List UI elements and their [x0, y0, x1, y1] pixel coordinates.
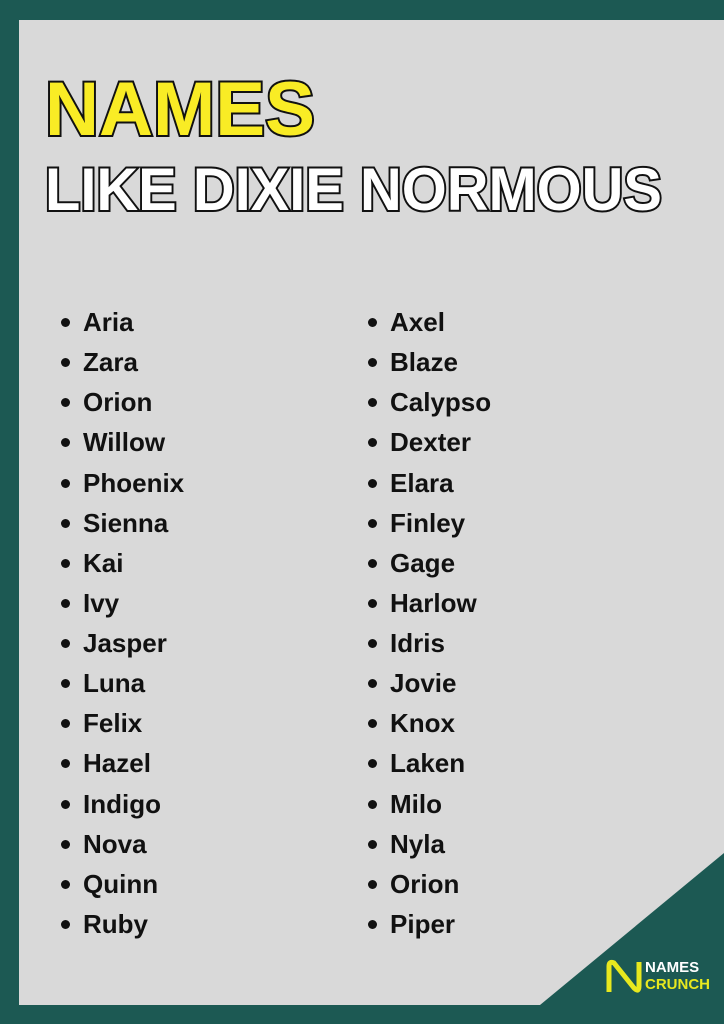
list: right column — [368, 307, 491, 939]
list: right column: Dexter — [390, 427, 471, 457]
list: right column: Jovie — [390, 668, 456, 698]
list: right column: Finley — [390, 508, 465, 538]
list: right column: Harlow — [390, 588, 477, 618]
list: right column: Milo — [390, 788, 442, 818]
list: right column: Orion — [390, 869, 459, 899]
icon: N logo — [606, 960, 642, 993]
title: LIKE DIXIE NORMOUS — [45, 156, 662, 223]
list: left column: Felix — [83, 708, 142, 738]
list: left column: Orion — [83, 387, 152, 417]
list: right column: Knox — [390, 708, 455, 738]
list: right column: Calypso — [390, 387, 491, 417]
list: right column: Axel — [390, 307, 445, 337]
list: left column: Indigo — [83, 788, 161, 818]
list: left column: Hazel — [83, 748, 151, 778]
list: left column: Kai — [83, 548, 123, 578]
logo — [606, 959, 710, 993]
list: right column: Idris — [390, 628, 445, 658]
list: left column: Phoenix — [83, 468, 184, 498]
logo: CRUNCH — [645, 976, 710, 993]
list: left column: Jasper — [83, 628, 167, 658]
list: right column: Blaze — [390, 347, 458, 377]
list: left column: Ivy — [83, 588, 119, 618]
list: left column: Sienna — [83, 508, 168, 538]
list: right column: Piper — [390, 909, 455, 939]
list: left column: Zara — [83, 347, 138, 377]
title: NAMES — [45, 67, 315, 152]
list: right column: Gage — [390, 548, 455, 578]
list: right column: Laken — [390, 748, 465, 778]
list: left column: Quinn — [83, 869, 158, 899]
list: right column: Elara — [390, 468, 454, 498]
list: left column: Willow — [83, 427, 165, 457]
list: right column: Nyla — [390, 829, 445, 859]
list: left column — [61, 307, 184, 939]
title — [45, 67, 662, 223]
list: left column: Aria — [83, 307, 134, 337]
list: left column: Nova — [83, 829, 147, 859]
logo: NAMES — [645, 959, 699, 976]
list: left column: Luna — [83, 668, 145, 698]
list: left column: Ruby — [83, 909, 148, 939]
